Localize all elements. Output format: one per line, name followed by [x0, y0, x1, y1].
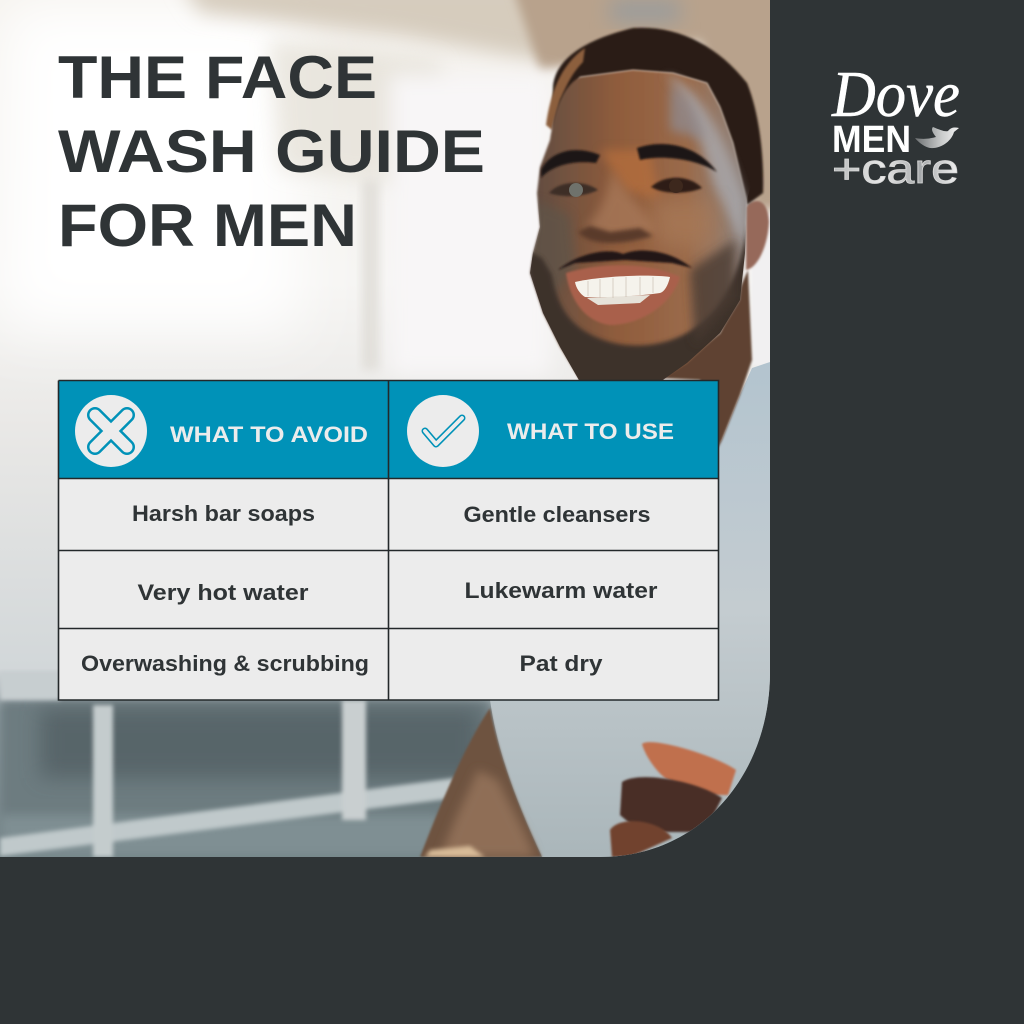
logo: Dove Men+Care: +care — [832, 145, 959, 192]
left cheek shade — [531, 198, 575, 284]
photo background — [0, 0, 790, 857]
heading: what to avoid: WHAT TO AVOID — [170, 422, 368, 447]
avoid items — [81, 501, 369, 676]
use items: Pat dry — [520, 651, 603, 676]
head — [527, 28, 769, 385]
beard — [527, 225, 748, 385]
use items — [464, 502, 658, 676]
avoid items: Overwashing & scrubbing — [81, 651, 369, 676]
logo: Dove Men+Care: Dove — [831, 58, 960, 131]
comparison table — [58, 380, 718, 700]
icon: cross — [75, 395, 147, 467]
logo: Dove Men+Care — [831, 58, 960, 192]
eyebrows — [541, 150, 600, 178]
arm — [420, 708, 542, 857]
table cells background — [59, 381, 718, 700]
forehead light — [665, 74, 745, 250]
ear — [746, 201, 769, 270]
brow glow — [600, 150, 660, 200]
title: WASH GUIDE — [58, 118, 485, 185]
hair — [553, 28, 763, 205]
photo: smiling man running — [0, 0, 790, 857]
header row — [59, 381, 718, 478]
icon: check — [407, 395, 479, 467]
table grid — [58, 380, 718, 700]
face — [530, 70, 747, 380]
teeth — [575, 276, 670, 305]
shirt — [490, 362, 770, 857]
mouth — [566, 265, 680, 325]
use items: Gentle cleansers — [464, 502, 650, 527]
use items: Lukewarm water — [464, 578, 658, 603]
title — [58, 44, 485, 259]
title: THE FACE — [58, 44, 377, 111]
neck — [660, 270, 752, 448]
title: FOR MEN — [58, 192, 357, 259]
mustache — [558, 251, 692, 270]
eyes — [549, 183, 598, 196]
avoid items: Harsh bar soaps — [132, 501, 315, 526]
avoid items: Very hot water — [138, 580, 309, 605]
heading: what to use: WHAT TO USE — [507, 419, 674, 444]
nose — [578, 176, 653, 245]
fist — [610, 742, 736, 857]
logo: Dove Men+Care: MEN — [832, 119, 911, 161]
